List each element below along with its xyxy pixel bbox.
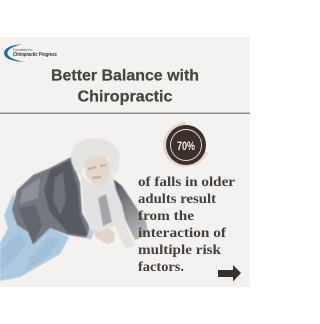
right arm sleeve [112,178,148,240]
jeans [0,192,69,281]
statistic text: multiple risk [138,243,221,258]
statistic text: of falls in older [138,175,235,190]
badge outer ring [163,122,208,167]
cuff and hand [86,226,96,240]
title: Chiropractic [78,88,173,106]
statistic text [138,175,235,275]
badge dark disc [166,125,206,165]
logo: Chiropractic Progress [13,52,57,58]
panel: background [0,37,250,287]
neck and scarf [81,172,136,248]
arrow icon [218,265,241,282]
title [51,68,199,106]
illustration: fallen older woman [0,138,148,281]
statistic text: interaction of [138,226,226,241]
face [83,152,111,187]
logo [4,44,57,62]
divider line [0,113,250,114]
infographic [0,37,250,287]
statistic text: adults result [138,192,216,207]
hair [71,138,120,175]
statistic text: factors. [138,260,184,275]
badge value: 70% [177,139,195,153]
stat badge: 70% [163,122,208,167]
statistic text: from the [138,209,194,224]
badge inner ring [170,130,202,160]
jacket [12,157,90,245]
title: Better Balance with [51,68,199,84]
logo: Foundation for [13,48,33,52]
